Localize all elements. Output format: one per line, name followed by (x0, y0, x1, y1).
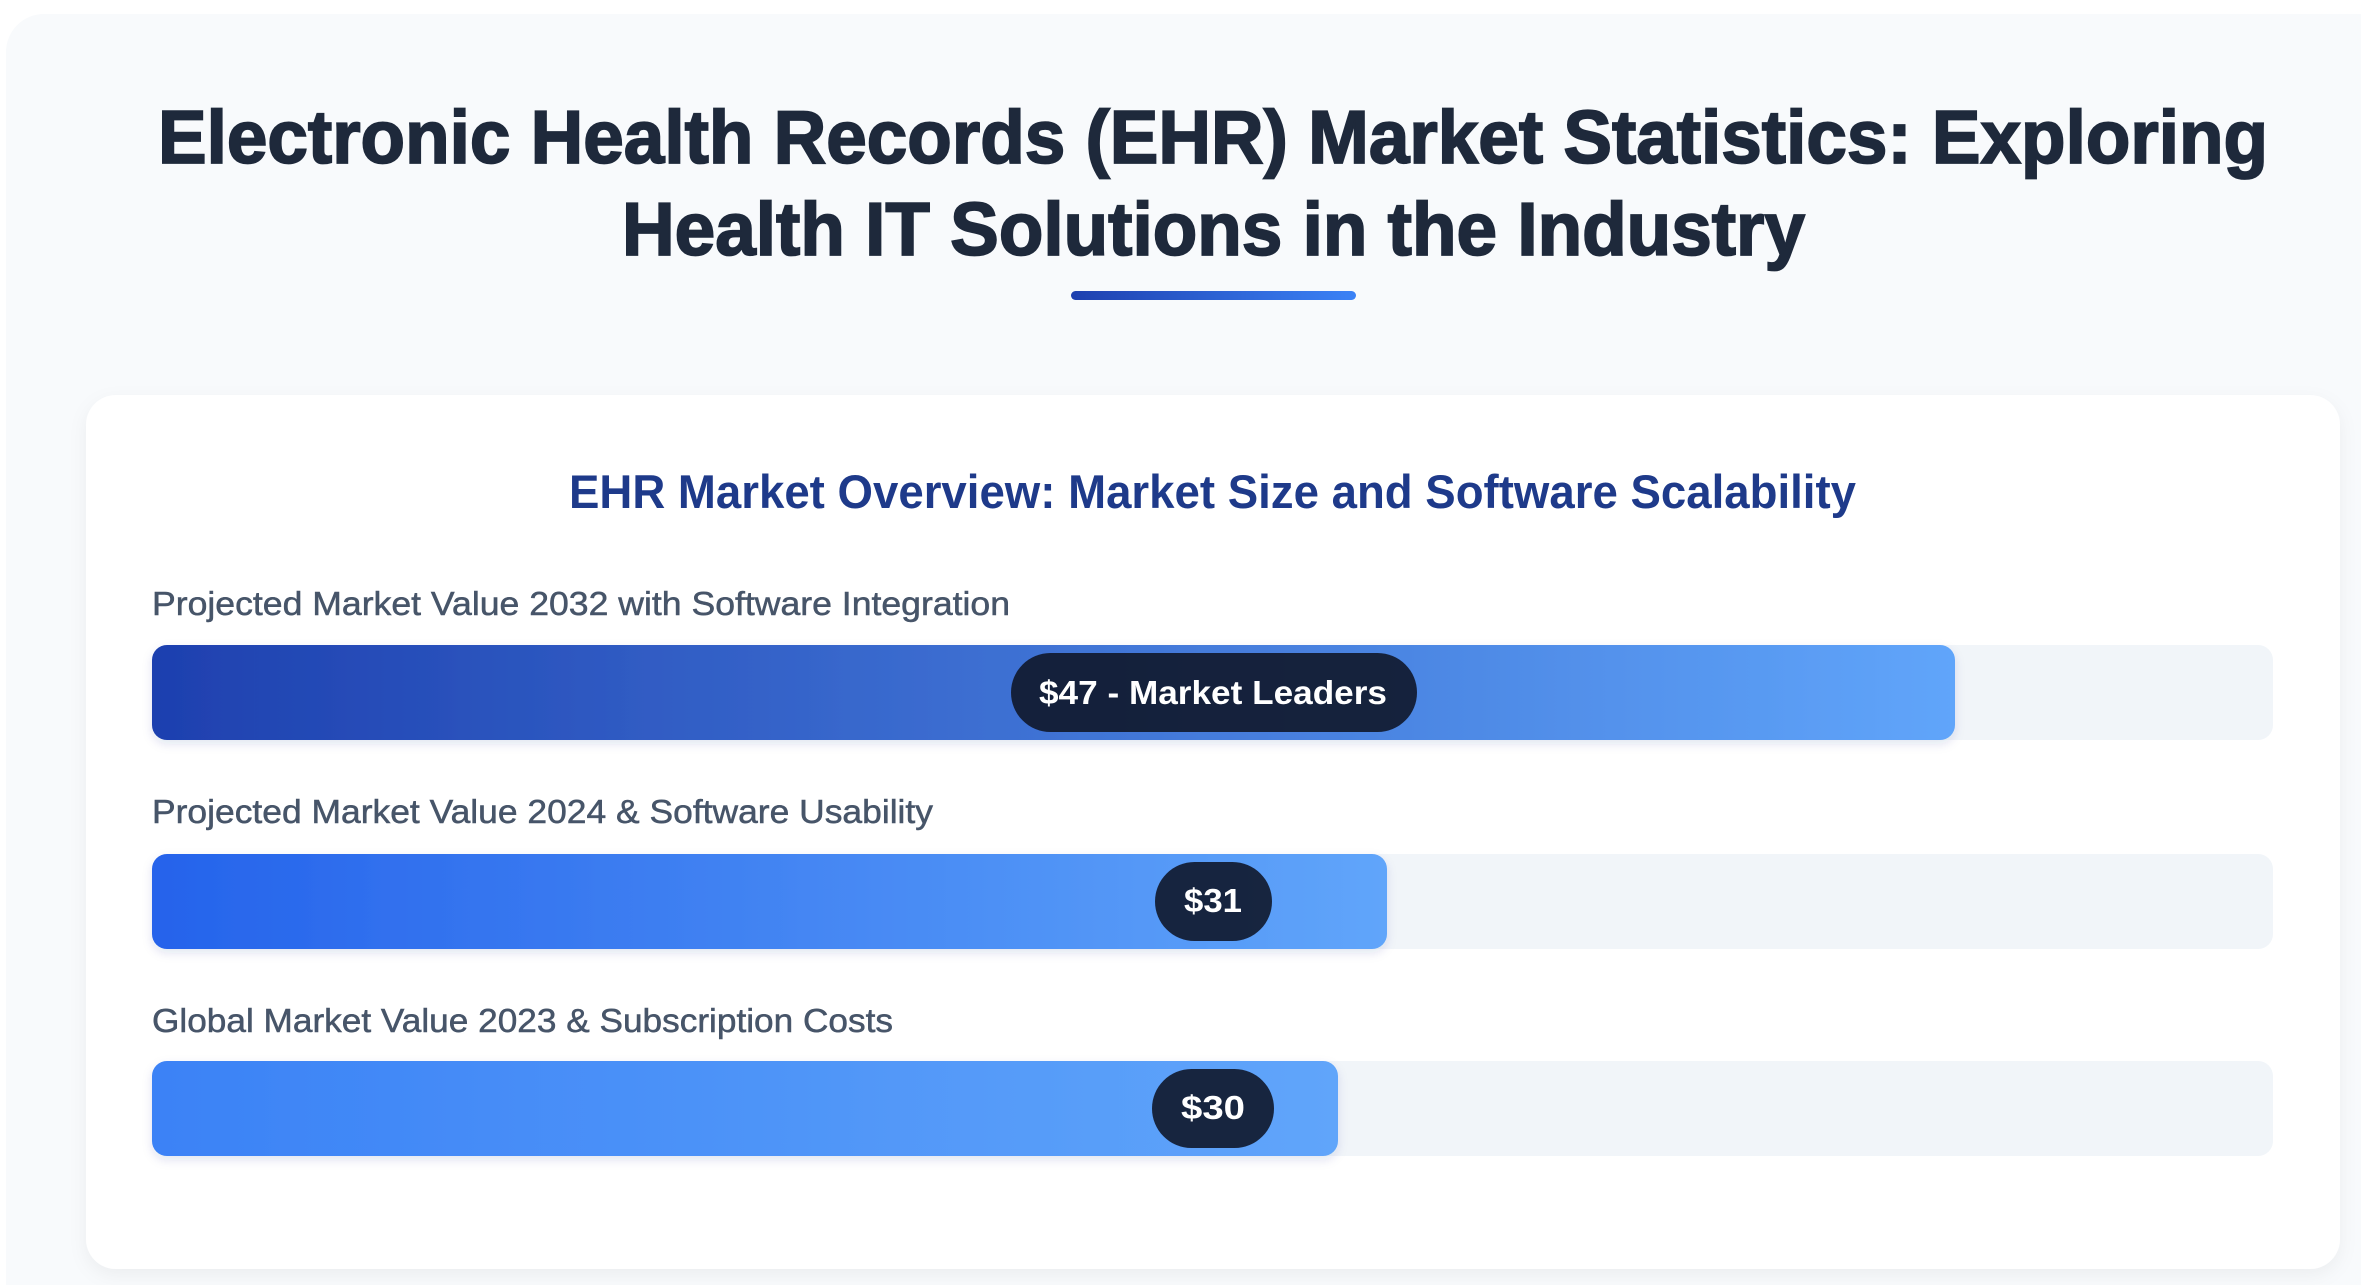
value pill: $47 (1011, 653, 1417, 732)
value pill: $31: $31 (1184, 882, 1242, 919)
bar track: 2023 (152, 1061, 2273, 1156)
bar track: 2032 (152, 645, 2273, 740)
label: 2032: Projected Market Value 2032 with Software Integration (152, 585, 1010, 622)
label: 2024: Projected Market Value 2024 & Software Usability (152, 793, 934, 830)
bar row: projected market value 2024 (152, 793, 2273, 949)
title (158, 95, 2268, 271)
value pill: $30 (1152, 1069, 1274, 1148)
heading: market overview: EHR Market Overview: Market Size and Software Scalability (569, 465, 1856, 518)
label: 2023: Global Market Value 2023 & Subscription Costs (152, 1002, 893, 1039)
bar row: projected market value 2032 (152, 585, 2273, 740)
bar fill: 2023 (152, 1061, 1338, 1156)
bar fill: 2032 (152, 645, 1955, 740)
bar fill: 2024 (152, 854, 1387, 949)
value pill: $30: $30 (1181, 1089, 1245, 1126)
title: Health IT Solutions in the Industry (622, 187, 1805, 271)
title: Electronic Health Records (EHR) Market Statistics: Exploring (158, 95, 2268, 179)
bar row: global market value 2023 (152, 1002, 2273, 1156)
bar track: 2024 (152, 854, 2273, 949)
value pill: $47: $47 - Market Leaders (1039, 674, 1387, 711)
value pill: $31 (1155, 862, 1272, 941)
panel: market overview card (86, 395, 2340, 1269)
title underline (1071, 291, 1356, 300)
